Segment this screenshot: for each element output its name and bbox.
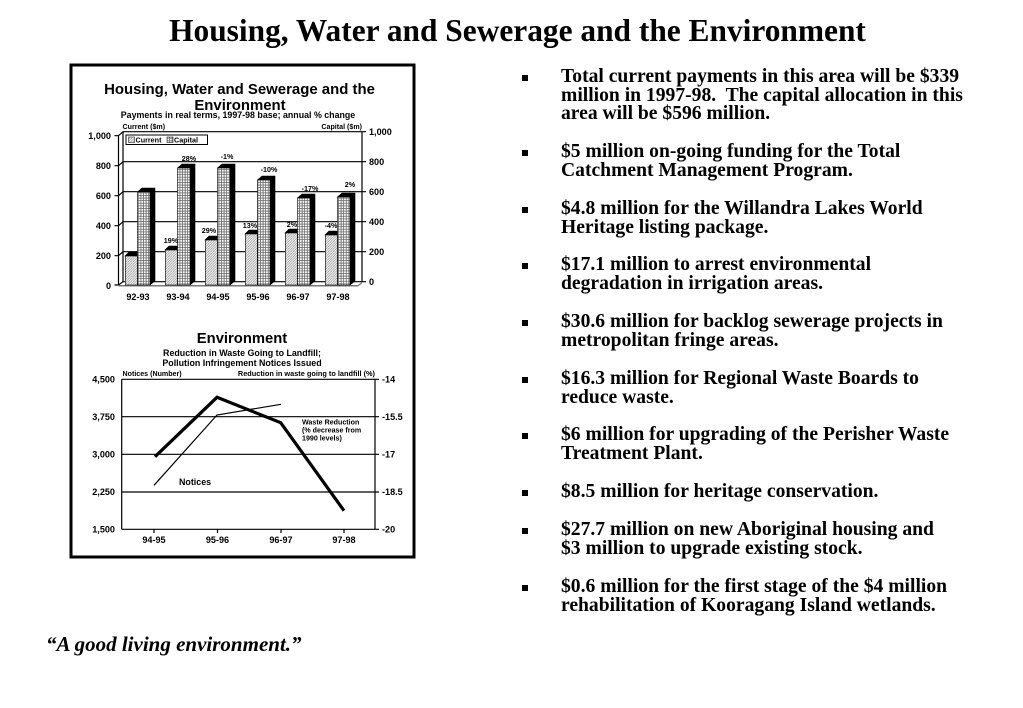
category labels: 94-95 [206,292,230,302]
left axis labels: 2,250 [92,487,115,497]
bullet 2: $5 million on-going funding for the Total [561,141,900,162]
category labels: 96-97 [286,292,310,302]
right axis labels [382,374,403,534]
left axis labels: 4,500 [92,374,115,384]
bullet 5 [522,311,943,351]
bullet 9: $3 million to upgrade existing stock. [561,538,863,559]
bullet 6: reduce waste. [561,387,674,408]
left axis labels: 400 [96,221,111,231]
annual change labels: 19% [164,236,179,245]
left axis labels: 0 [106,281,111,291]
heading: housing chart: Housing, Water and Sewerage and the [104,81,375,98]
subtitle: environment chart: Pollution Infringement Notices Issued [162,358,322,368]
quote: “A good living environment.” [46,632,302,656]
category labels [126,292,350,302]
legend: Current [136,136,162,145]
category labels: 97-98 [326,292,350,302]
right axis labels: 400 [369,217,384,227]
bar chart: housing payments: Capital ($m) [321,123,363,131]
left axis labels: 1,000 [88,131,111,141]
bullet 10: rehabilitation of Kooragang Island wetlands. [561,595,936,616]
annual change labels: 2% [345,180,356,189]
category labels [142,535,356,545]
bullet 6: $16.3 million for Regional Waste Boards to [561,368,919,389]
annual change labels: -17% [302,184,319,193]
category labels: 97-98 [332,535,356,545]
label: waste reduction: 1990 levels) [302,434,342,442]
bullet 4 [522,254,871,294]
annual change labels: 29% [202,226,217,235]
legend: Capital [174,136,198,145]
left axis labels: 200 [96,251,111,261]
bullet 9: $27.7 million on new Aboriginal housing and [561,519,934,540]
legend [126,135,208,145]
bullet 1 [522,66,963,124]
category labels: 92-93 [126,292,150,302]
bullet 3 [522,198,923,238]
bullet 1: area will be $596 million. [561,103,770,124]
right axis labels [369,127,392,287]
right axis labels: 200 [369,247,384,257]
left axis labels: 3,000 [92,450,115,460]
annual change labels [164,152,356,245]
right axis labels: -20 [382,524,395,534]
subtitle: environment chart [162,348,322,368]
left axis labels: 1,500 [92,524,115,534]
category labels: 95-96 [246,292,270,302]
line chart: environment: Notices (Number) [122,370,182,378]
bullet 2: Catchment Management Program. [561,160,853,181]
annual change labels: -10% [261,165,278,174]
category labels: 96-97 [269,535,293,545]
bullet 2 [522,141,900,181]
bullet 5: metropolitan fringe areas. [561,330,778,351]
category labels: 94-95 [142,535,166,545]
bullet 7: Treatment Plant. [561,443,703,464]
line chart: environment: Reduction in waste going to landfill (%) [238,369,376,378]
category labels: 93-94 [166,292,191,302]
line: notices [154,404,281,485]
bullet 1: Total current payments in this area will be $339 [561,66,959,87]
right axis labels: -17 [382,450,395,460]
left axis labels: 800 [96,161,111,171]
line: waste reduction [155,397,344,511]
bullet 8: $8.5 million for heritage conservation. [561,481,878,502]
label: waste reduction: Waste Reduction [302,418,359,426]
category labels: 95-96 [206,535,229,545]
bullet 4: $17.1 million to arrest environmental [561,254,871,275]
right axis labels: 1,000 [369,127,392,137]
bullet 1: million in 1997-98. The capital allocation in this [561,85,963,106]
right axis labels: -15.5 [382,412,403,422]
title: Housing, Water and Sewerage and the Environment [169,13,866,48]
bullet 5: $30.6 million for backlog sewerage projects in [561,311,943,332]
bullet 7: $6 million for upgrading of the Perisher Waste [561,424,949,445]
annual change labels: 13% [243,221,258,230]
bullet 10 [522,576,947,616]
axes and gridlines [122,379,379,533]
right axis labels: 0 [369,277,374,287]
annual change labels: -4% [325,221,338,230]
label: waste reduction [302,418,361,442]
bars [125,164,355,285]
bullet 6 [522,368,919,408]
annual change labels: 2% [287,220,298,229]
bullet 7 [522,424,949,464]
bar chart: housing payments: Current ($m) [122,123,166,131]
bullet 9 [522,519,934,559]
heading: environment chart: Environment [197,331,287,347]
annual change labels: 28% [182,154,197,163]
subtitle: housing chart: Payments in real terms, 1997-98 base; annual % change [121,110,355,120]
bullet 10: $0.6 million for the first stage of the $4 million [561,576,947,597]
left axis labels: 600 [96,191,111,201]
right axis labels: -18.5 [382,487,403,497]
right axis labels: -14 [382,374,396,384]
right axis labels: 600 [369,187,384,197]
heading: housing chart [104,81,375,114]
bullet 3: Heritage listing package. [561,217,768,238]
left axis labels [88,131,111,291]
label: notices: Notices [179,477,211,487]
annual change labels: -1% [221,152,234,161]
heading: housing chart: Environment [194,97,286,114]
gridlines [114,132,366,285]
bullet 3: $4.8 million for the Willandra Lakes World [561,198,923,219]
subtitle: environment chart: Reduction in Waste Going to Landfill; [163,348,321,358]
left axis labels: 3,750 [92,412,115,422]
bullet 4: degradation in irrigation areas. [561,273,823,294]
bar chart: housing payments [88,123,392,302]
right axis labels: 800 [369,157,384,167]
left axis labels [92,374,115,534]
line chart: environment [92,369,403,545]
label: waste reduction: (% decrease from [302,426,361,434]
